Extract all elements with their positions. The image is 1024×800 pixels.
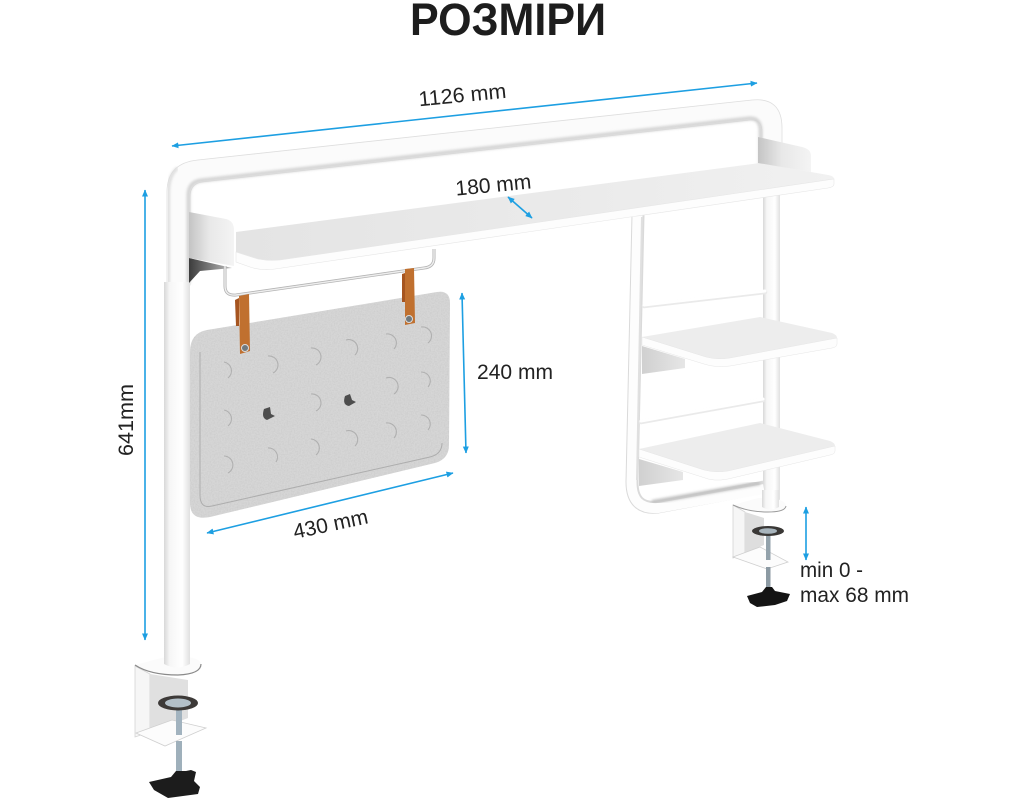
- felt panel: [190, 292, 450, 518]
- shelf front edge: [236, 179, 834, 270]
- dimension: 240 mm: [462, 293, 553, 453]
- left clamp: [135, 655, 206, 798]
- arrow: [462, 293, 466, 453]
- top rail tube: [167, 100, 782, 285]
- top plate: [135, 657, 201, 675]
- hanging rail: [225, 249, 434, 295]
- arrow: [172, 83, 757, 146]
- arrow: [805, 507, 807, 560]
- label: max 68 mm: [800, 584, 909, 607]
- hook left: [263, 407, 275, 420]
- right post: [763, 190, 780, 508]
- felt board: [190, 292, 450, 518]
- bottom plate: [136, 720, 206, 746]
- front edge: [642, 337, 837, 367]
- label: min 0 -: [800, 559, 863, 582]
- hook right: [344, 394, 356, 406]
- back plate: [135, 666, 150, 737]
- leather strap right: [402, 268, 415, 325]
- right clamp: [733, 490, 790, 607]
- label: 430 mm: [291, 505, 370, 544]
- arrow: [508, 197, 532, 218]
- back plate: [733, 505, 745, 558]
- shelf shadow bracket: left: [189, 258, 232, 283]
- right end fin: [758, 137, 811, 172]
- label: 240 mm: [477, 361, 553, 384]
- disc: [752, 526, 784, 536]
- label: 641mm: [115, 384, 138, 456]
- stitched inner line: [200, 352, 442, 507]
- main shelf: [189, 137, 834, 283]
- front edge: [639, 446, 835, 480]
- bottom plate: [733, 547, 788, 569]
- bracket: [639, 459, 683, 486]
- label: 1126 mm: [417, 80, 507, 111]
- cross bars: [641, 291, 765, 422]
- left end fin: [189, 212, 234, 266]
- dimension: clamp range: [800, 507, 909, 607]
- knob: [747, 587, 790, 607]
- post collar: [164, 655, 190, 668]
- shelf surface: [236, 163, 834, 260]
- dimension: 1126 mm: [172, 80, 757, 146]
- screw upper: [766, 535, 770, 560]
- felt circle pattern: [224, 327, 432, 473]
- top plate: [733, 498, 786, 512]
- screw lower: [766, 567, 770, 592]
- small shelf upper: [642, 317, 837, 374]
- dimension: 430 mm: [207, 473, 453, 544]
- knob: [149, 770, 200, 798]
- leather strap left: [235, 294, 250, 354]
- left post: [164, 282, 190, 664]
- arrow: [207, 473, 453, 533]
- inner side tube: [632, 215, 764, 508]
- screw lower: [176, 741, 182, 774]
- arrow: [144, 190, 146, 640]
- dimension: 180 mm: [454, 170, 532, 218]
- surface: [642, 317, 837, 359]
- desk shelf frame: [164, 100, 782, 664]
- screw upper: [176, 708, 182, 735]
- label: 180 mm: [454, 170, 532, 201]
- post collar: [762, 490, 779, 510]
- small shelf lower: [639, 423, 835, 486]
- surface: [639, 423, 835, 472]
- disc: [158, 696, 198, 710]
- bracket: [642, 346, 685, 374]
